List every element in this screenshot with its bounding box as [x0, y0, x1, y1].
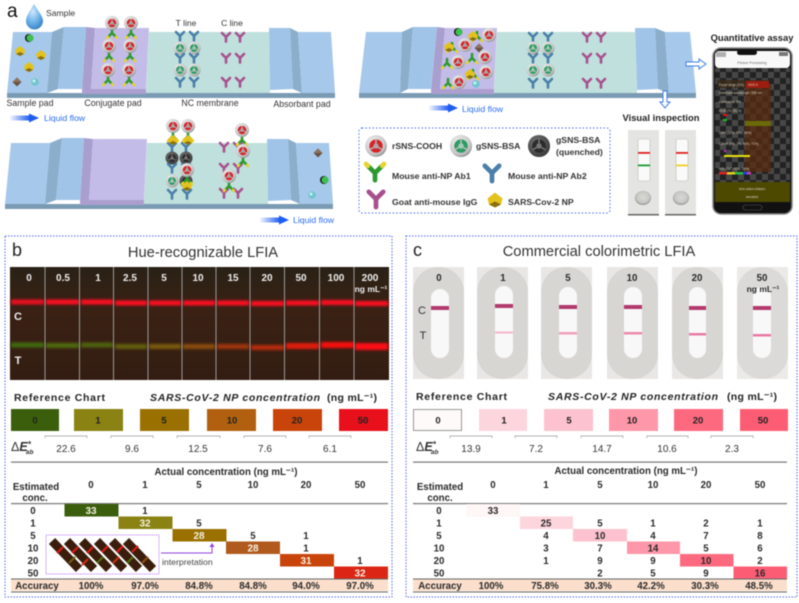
- liquid flow arrow 2: [260, 215, 335, 225]
- strip photo 5: [541, 267, 592, 379]
- confusion table b: 97.0%: [346, 581, 374, 592]
- reference chart swatches c: 20: [693, 416, 703, 426]
- confusion table c: 1: [543, 556, 549, 567]
- delta E row c: [416, 436, 753, 456]
- panel b: hue-recognizable LFIA: [5, 236, 392, 597]
- confusion table c: 30.3%: [584, 581, 612, 592]
- panel a: assay schematics: [5, 1, 794, 225]
- confusion table c: 48.5%: [745, 581, 773, 592]
- confusion table b: 84.8%: [185, 581, 213, 592]
- strip photo 50: 50: [757, 273, 767, 284]
- delta E row b: [11, 436, 351, 456]
- confusion table b: 5: [196, 480, 202, 491]
- liquid flow arrow 3: Liquid flow: [462, 104, 504, 114]
- reference chart swatches c: 0: [435, 416, 441, 426]
- photo of fluorescent strips: C: [14, 311, 22, 323]
- photo of fluorescent strips: 50: [295, 273, 307, 284]
- strip photo 5: 5: [565, 273, 571, 284]
- strip part labels: Sample pad: [7, 98, 54, 108]
- delta E row c: *: [433, 440, 437, 449]
- confusion table c: 5: [597, 518, 603, 530]
- delta E row c: ab: [431, 449, 438, 456]
- smartphone with app: [713, 48, 792, 214]
- strip photo 1: [477, 267, 528, 379]
- photo of fluorescent strips: 100: [328, 273, 345, 284]
- delta E row b: 22.6: [56, 444, 76, 455]
- confusion table c: 5: [597, 480, 603, 491]
- legend: (quenched): [556, 147, 603, 157]
- confusion table b: 10: [28, 544, 38, 554]
- confusion table c: 1: [757, 518, 763, 530]
- delta E row b: 6.1: [323, 444, 337, 455]
- confusion table c: 8: [757, 531, 763, 542]
- reference chart swatches b: 5: [161, 416, 167, 426]
- arrow to visual inspection: [660, 91, 670, 108]
- title b: Hue-recognizable LFIA: [128, 245, 278, 261]
- confusion table b: 1: [303, 544, 309, 554]
- confusion table b: 97.0%: [131, 581, 159, 592]
- strip part labels: Conjugate pad: [84, 98, 142, 108]
- liquid flow arrow 3: [429, 104, 504, 114]
- strip part labels: NC membrane: [181, 98, 239, 108]
- confusion table b: 1: [30, 518, 36, 530]
- reference chart swatches c: 1: [501, 416, 507, 426]
- reference chart header b: (ng mL⁻¹): [327, 392, 377, 404]
- confusion table c: 20: [701, 480, 711, 491]
- liquid flow arrow 2: Liquid flow: [293, 215, 335, 225]
- reference chart swatches b: 10: [227, 416, 237, 426]
- confusion table c: 10: [648, 480, 658, 491]
- confusion table c: 7: [703, 531, 709, 542]
- confusion table c: 75.8%: [531, 581, 559, 592]
- panel letter c: c: [413, 240, 422, 260]
- confusion table b: Accuracy: [15, 581, 59, 592]
- liquid flow arrow 1: [10, 113, 86, 123]
- delta E row b: ΔE: [11, 440, 28, 454]
- strip photo 10: [607, 267, 658, 379]
- interpretation arrow: interpretation: [162, 557, 213, 567]
- reference chart swatches c: 10: [627, 416, 637, 426]
- confusion table b: 0: [30, 506, 36, 517]
- quantitative assay heading: Quantitative assay: [711, 32, 794, 43]
- photo of fluorescent strips: 20: [261, 273, 273, 284]
- smartphone with app: Picture Processing: [737, 61, 767, 65]
- confusion table b: 1: [142, 506, 148, 517]
- strip photo 10: 10: [627, 273, 637, 284]
- panel c: commercial colorimetric LFIA: [406, 236, 797, 597]
- confusion table c: 2: [597, 568, 603, 580]
- reference chart header c: Reference Chart: [416, 391, 508, 403]
- reference chart header c: (ng mL⁻¹): [727, 391, 777, 403]
- delta E row b: ab: [26, 449, 33, 456]
- photo of fluorescent strips: 10: [192, 273, 204, 284]
- confusion table c: 4: [543, 531, 549, 542]
- inset: strips for interpretation: [46, 535, 159, 574]
- T line and C line labels: T line: [176, 18, 197, 28]
- legend: SARS-Cov-2 NP: [508, 197, 574, 207]
- confusion table c: conc.: [427, 493, 453, 504]
- smartphone with app: Focal range (10s): [719, 83, 744, 87]
- confusion table b: 100%: [79, 581, 104, 592]
- confusion table b: [11, 462, 388, 592]
- panel letter b: b: [12, 240, 22, 260]
- confusion table b: 10: [248, 480, 258, 491]
- confusion table b: 50: [355, 480, 365, 491]
- confusion table c: 1: [650, 518, 656, 530]
- confusion table c: 14: [648, 544, 659, 554]
- confusion table c: 6: [757, 544, 763, 554]
- confusion table b: 20: [301, 480, 311, 491]
- reference chart swatches b: 20: [292, 416, 302, 426]
- strip part labels: Absorbant pad: [273, 99, 331, 109]
- smartphone with app: Dominant wavelength: 565 nm: [719, 91, 762, 95]
- sample label: Sample: [46, 8, 75, 18]
- legend: gSNS-BSA: [556, 135, 601, 145]
- strip part labels: [7, 98, 331, 109]
- strip 3: test strip with sample: [359, 27, 696, 98]
- confusion table c: 9: [650, 556, 656, 567]
- confusion table c: 50: [434, 568, 444, 580]
- liquid flow arrow 1: Liquid flow: [44, 113, 86, 123]
- confusion table b: 28: [247, 544, 259, 554]
- confusion table b: conc.: [22, 493, 48, 504]
- delta E row c: ΔE: [416, 440, 433, 454]
- photo of fluorescent strips: 200: [362, 273, 379, 284]
- confusion table c: 10: [701, 556, 711, 567]
- reference chart header b: [14, 392, 377, 404]
- confusion table b: 0: [88, 480, 94, 491]
- confusion table c: 1: [436, 518, 442, 530]
- photo of fluorescent strips: 2.5: [123, 273, 137, 284]
- T line and C line labels: C line: [221, 18, 243, 28]
- photo of fluorescent strips: 0: [26, 273, 32, 284]
- photo of fluorescent strips: 15: [227, 273, 239, 284]
- confusion table c: Estimated: [417, 482, 463, 493]
- legend: [359, 128, 610, 213]
- delta E row c: 14.7: [592, 444, 612, 455]
- reference chart swatches b: [11, 409, 388, 431]
- delta E row b: *: [28, 440, 32, 449]
- strip photo 0: 0: [436, 273, 442, 284]
- confusion table c: 20: [434, 556, 444, 567]
- confusion table b: 84.8%: [239, 581, 267, 592]
- confusion table c: 33: [488, 506, 499, 517]
- smartphone with app: Luminance: 8%: [719, 100, 741, 104]
- legend: Goat anti-mouse IgG: [392, 197, 478, 207]
- legend: Mouse anti-NP Ab2: [508, 171, 587, 181]
- confusion table b: 5: [196, 518, 202, 530]
- reference chart header c: SARS-CoV-2 NP concentration: [548, 391, 718, 403]
- confusion table c: 100%: [479, 581, 504, 592]
- delta E row c: 7.2: [529, 444, 543, 455]
- confusion table c: 9: [703, 568, 709, 580]
- arrow to quantitative assay: [686, 59, 706, 69]
- strip photo 0: [413, 267, 464, 379]
- reference chart swatches b: 1: [95, 416, 101, 426]
- reference chart header b: SARS-CoV-2 NP concentration: [150, 392, 320, 404]
- strip photo 50: ng mL⁻¹: [747, 284, 780, 294]
- panel letter a: a: [7, 1, 18, 22]
- photo of fluorescent strips: 0.5: [56, 273, 70, 284]
- reference chart swatches b: 50: [358, 416, 368, 426]
- strip photo 1: 1: [500, 273, 506, 284]
- strip photo 20: 20: [692, 273, 702, 284]
- test cassette 2: [665, 130, 696, 216]
- delta E row c: 10.6: [657, 444, 677, 455]
- photo of fluorescent strips: ng mL⁻¹: [355, 284, 388, 294]
- confusion table b: 32: [354, 568, 366, 580]
- confusion table c: 7: [597, 544, 603, 554]
- photo of fluorescent strips: [10, 267, 389, 380]
- title c: Commercial colorimetric LFIA: [503, 244, 696, 260]
- smartphone with app: RGB (71, 65, 0): [719, 109, 741, 113]
- reference chart swatches c: [414, 409, 788, 431]
- reference chart swatches b: 0: [32, 416, 38, 426]
- reference chart swatches c: 5: [566, 416, 572, 426]
- confusion table c: 30.3%: [691, 581, 719, 592]
- strip photo 50: [737, 267, 788, 379]
- legend: gSNS-BSA: [476, 141, 521, 151]
- reference chart swatches c: 50: [758, 416, 768, 426]
- delta E row c: 13.9: [461, 444, 481, 455]
- confusion table c: 16: [755, 568, 766, 580]
- confusion table c: 5: [650, 568, 656, 580]
- confusion table c: 4: [650, 531, 656, 542]
- confusion table c: [413, 462, 787, 592]
- smartphone with app: HSL (56°, 92%, 14%): [719, 167, 749, 171]
- delta E row b: 7.6: [258, 444, 272, 455]
- confusion table b: 28: [193, 531, 205, 542]
- confusion table c: 0: [490, 480, 496, 491]
- confusion table c: 42.2%: [637, 581, 665, 592]
- smartphone with app: 4000 K: [748, 83, 759, 87]
- icon: sample drop: [26, 4, 43, 30]
- strip photo 20: [672, 267, 723, 379]
- confusion table c: Actual concentration (ng mL⁻¹): [555, 466, 697, 477]
- confusion table b: 1: [303, 531, 309, 542]
- confusion table b: 1: [357, 556, 363, 567]
- confusion table c: 2: [703, 518, 709, 530]
- legend: Mouse anti-NP Ab1: [392, 171, 471, 181]
- smartphone with app: CMY (11%, 75%, 99%): [719, 131, 751, 135]
- confusion table b: 5: [250, 531, 256, 542]
- delta E row c: 2.3: [725, 444, 739, 455]
- strip photo 0: T: [420, 330, 427, 342]
- confusion table b: 1: [142, 480, 148, 491]
- test cassette 1: [628, 130, 659, 216]
- photo of fluorescent strips: T: [15, 355, 22, 367]
- photo of fluorescent strips: 5: [161, 273, 167, 284]
- confusion table c: 25: [541, 518, 552, 530]
- reference chart header b: Reference Chart: [14, 392, 106, 404]
- confusion table b: 31: [300, 556, 312, 567]
- visual inspection heading: Visual inspection: [623, 112, 700, 123]
- T line and C line labels: [176, 18, 243, 28]
- smartphone with app: 50% AREA GREEN: [739, 187, 765, 191]
- confusion table c: 1: [543, 480, 549, 491]
- strip 2: after flow: [5, 119, 333, 209]
- delta E row b: 12.5: [188, 444, 208, 455]
- confusion table c: 50: [755, 480, 765, 491]
- confusion table c: 10: [595, 531, 605, 542]
- confusion table c: 5: [436, 531, 442, 542]
- confusion table b: 50: [28, 568, 38, 580]
- smartphone with app: #4A4500: [746, 195, 758, 199]
- smartphone with app: CMYK (0%, 7%, 99%, 71%): [719, 142, 759, 146]
- confusion table b: 20: [28, 556, 38, 567]
- confusion table c: 9: [597, 556, 603, 567]
- delta E row b: 9.6: [125, 444, 139, 455]
- confusion table c: 0: [436, 506, 442, 517]
- confusion table c: 10: [434, 544, 444, 554]
- confusion table c: 2: [757, 556, 763, 567]
- strip photo 0: C: [418, 305, 426, 317]
- confusion table b: Estimated: [13, 482, 59, 493]
- confusion table b: 5: [30, 531, 36, 542]
- confusion table b: 94.0%: [292, 581, 320, 592]
- confusion table c: Accuracy: [418, 581, 462, 592]
- strip 1: before flow: [7, 16, 335, 98]
- confusion table b: 33: [85, 506, 97, 517]
- confusion table b: Actual concentration (ng mL⁻¹): [155, 467, 297, 478]
- confusion table c: 5: [703, 544, 709, 554]
- photo of fluorescent strips: 1: [95, 273, 101, 284]
- confusion table b: 32: [139, 518, 151, 530]
- reference chart header c: [416, 391, 777, 403]
- legend: rSNS-COOH: [392, 141, 442, 151]
- interpretation arrow: [161, 543, 214, 567]
- confusion table c: 3: [543, 544, 549, 554]
